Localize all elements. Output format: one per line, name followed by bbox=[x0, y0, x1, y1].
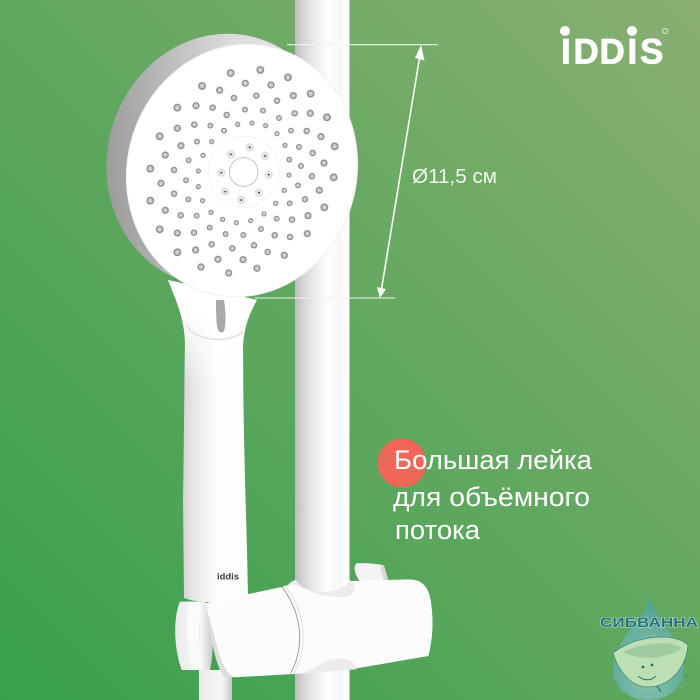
handle bbox=[168, 280, 257, 602]
hose stub bbox=[199, 670, 232, 700]
bracket body bbox=[205, 579, 433, 677]
diameter label: Ø11,5 см bbox=[412, 165, 497, 188]
headline: Большая лейка bbox=[394, 445, 593, 475]
red accent circle bbox=[378, 438, 426, 488]
brand name: СИБВАННА bbox=[600, 614, 698, 630]
clip fork bbox=[175, 602, 213, 670]
lower collar bbox=[295, 658, 356, 674]
tub face bbox=[638, 664, 656, 680]
shower bracket bbox=[175, 563, 433, 677]
neck highlight bbox=[168, 280, 257, 385]
bathtub bbox=[613, 637, 688, 687]
nozzles bbox=[146, 66, 339, 277]
pole upper section above bracket bbox=[295, 0, 350, 592]
watermark logo bbox=[600, 597, 698, 700]
tub feet bbox=[657, 675, 688, 692]
dimension arrow bbox=[377, 45, 424, 298]
water drop bbox=[613, 597, 684, 700]
brand logo: IDDIS bbox=[561, 32, 663, 72]
shower head shell bbox=[78, 8, 366, 312]
headline: для объёмного bbox=[393, 482, 590, 512]
shower head face bbox=[98, 18, 386, 323]
upper collar bbox=[288, 580, 355, 597]
headline: потока bbox=[395, 515, 481, 545]
central spray ring bbox=[208, 136, 279, 207]
neck shadow bbox=[186, 325, 243, 339]
handle logo: iddis bbox=[217, 572, 239, 582]
shower pole bbox=[295, 0, 350, 700]
hanger slot bbox=[216, 300, 226, 332]
dimension extension lines bbox=[255, 45, 438, 298]
body seam bbox=[282, 587, 300, 673]
bracket button bbox=[355, 563, 389, 588]
